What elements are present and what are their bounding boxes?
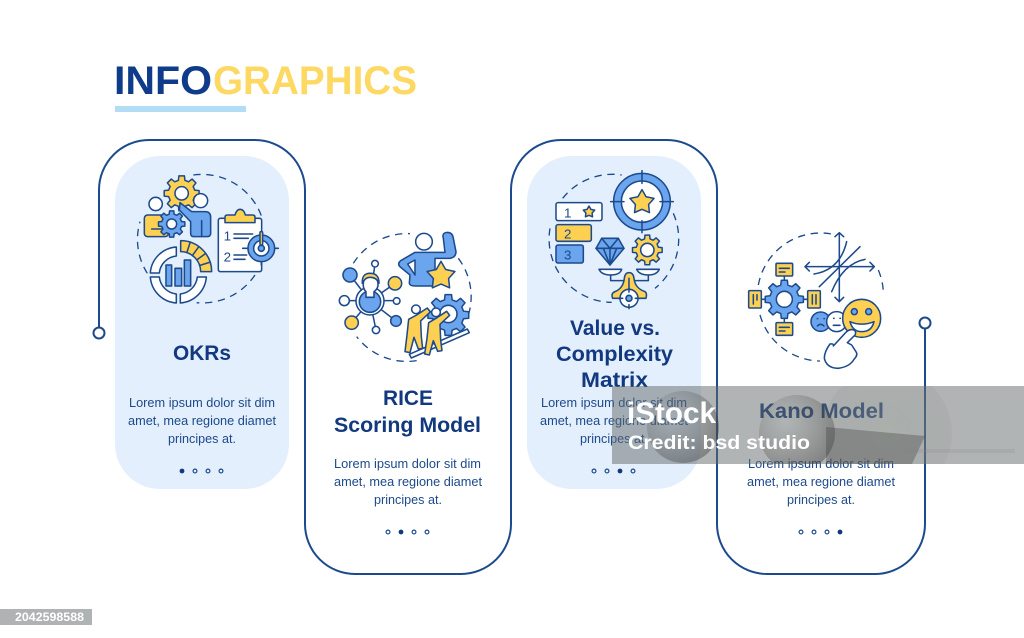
watermark banner: iStock — [627, 397, 716, 430]
heading: Value vs. Complexity Matrix: Matrix — [581, 369, 648, 392]
text: OKRs description: amet, mea regione diamet — [128, 414, 277, 428]
icon: value matrix: 2 — [564, 227, 571, 242]
icon: Kano — [749, 233, 883, 368]
outline start node — [94, 328, 104, 338]
icon: OKRs: 1 — [224, 229, 231, 244]
image id tag — [0, 609, 92, 625]
heading: RICE Scoring Model: Scoring Model — [334, 414, 481, 437]
text: Kano description: Lorem ipsum dolor sit dim — [748, 457, 894, 471]
pagination dots — [180, 469, 223, 473]
title underline — [115, 106, 246, 112]
icon: OKRs: 2 — [224, 249, 231, 264]
text: Kano description: principes at. — [787, 493, 855, 507]
text: Value description: Lorem ipsum dolor sit dim — [541, 396, 687, 410]
pagination dots — [799, 530, 842, 534]
icon: OKRs — [137, 174, 278, 303]
text: OKRs description — [128, 396, 277, 446]
text: Kano description — [747, 457, 896, 507]
heading: RICE Scoring Model: RICE — [383, 387, 433, 410]
heading: Value vs. Complexity Matrix: Value vs. — [570, 317, 660, 340]
icon: value matrix — [549, 171, 679, 309]
text: Kano description: amet, mea regione diamet — [747, 475, 896, 489]
panel: RICE Scoring Model — [334, 232, 483, 534]
panel: Kano Model — [747, 233, 896, 534]
text: RICE description: Lorem ipsum dolor sit dim — [334, 457, 481, 471]
panel: OKRs background — [115, 156, 289, 489]
text: OKRs description: Lorem ipsum dolor sit dim — [129, 396, 275, 410]
heading: Kano Model: Kano Model — [759, 400, 884, 423]
pagination dots — [386, 530, 429, 534]
heading: Value vs. Complexity Matrix: Complexity — [556, 343, 673, 366]
image id tag: 2042598588 — [15, 612, 85, 624]
text: Value description: amet, mea regione diamet — [540, 414, 689, 428]
heading: OKRs: OKRs — [173, 342, 231, 365]
heading: Value vs. Complexity Matrix — [556, 317, 673, 392]
text: RICE description: amet, mea regione diamet — [334, 475, 483, 489]
continuous panel outline — [99, 140, 925, 574]
heading: RICE Scoring Model — [334, 387, 481, 437]
text: RICE description: principes at. — [374, 493, 442, 507]
title: GRAPHICS — [213, 59, 417, 103]
text: RICE description — [334, 457, 483, 507]
title — [114, 59, 417, 103]
text: OKRs description: principes at. — [168, 432, 236, 446]
icon: value matrix: 3 — [564, 247, 571, 262]
text: Value description — [540, 396, 689, 446]
icon: value matrix: 1 — [564, 205, 571, 220]
watermark banner: Credit: bsd studio — [628, 433, 810, 454]
title: INFO — [114, 59, 212, 103]
panel: Value vs. Complexity Matrix background — [527, 156, 701, 489]
panel: OKRs — [128, 174, 278, 473]
outline end node — [920, 318, 930, 328]
panel: Value vs. Complexity Matrix — [540, 171, 689, 473]
icon: RICE — [339, 232, 471, 361]
watermark banner — [612, 386, 1024, 464]
pagination dots — [592, 469, 635, 473]
text: Value description: principes at. — [580, 432, 648, 446]
